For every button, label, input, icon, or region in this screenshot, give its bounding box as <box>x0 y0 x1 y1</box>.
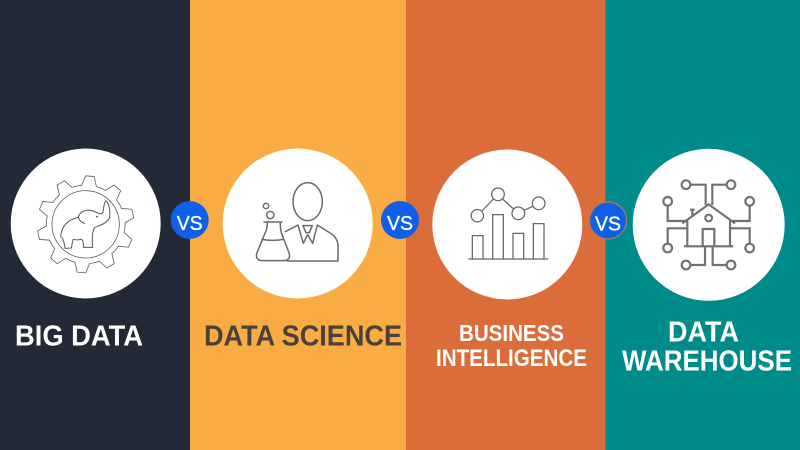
gear outline <box>30 171 141 278</box>
panel: business intelligence <box>406 0 606 450</box>
chimney <box>690 210 695 215</box>
heading line: data: DATA <box>668 316 739 348</box>
elephant eye <box>96 216 98 217</box>
white icon circle <box>223 148 373 298</box>
heading: business intelligence <box>436 320 587 372</box>
panel background: navy <box>0 0 190 450</box>
circuit traces <box>668 185 750 265</box>
white icon circle <box>11 148 161 298</box>
bars <box>472 215 544 259</box>
heading line: business: BUSINESS <box>459 320 564 346</box>
badge: vs 3 <box>590 202 626 239</box>
heading line: intelligence: INTELLIGENCE <box>436 345 587 372</box>
icon: house with circuit nodes <box>663 180 754 269</box>
white icon circle <box>633 149 785 301</box>
panel: data science <box>190 0 406 450</box>
badge: vs 2 <box>381 201 419 239</box>
trend circles <box>471 188 545 222</box>
elephant outline <box>61 201 110 248</box>
white icon circle <box>432 150 582 300</box>
icon: bar and line chart <box>468 188 548 259</box>
house outline <box>682 204 735 246</box>
heading: data warehouse <box>622 316 792 378</box>
panel: data warehouse <box>606 0 800 450</box>
heading: data science: DATA SCIENCE <box>204 320 402 352</box>
bubbles <box>263 203 269 209</box>
flask <box>256 222 290 261</box>
scientist suit <box>285 225 338 261</box>
badge: vs 1 <box>171 201 209 239</box>
baseline <box>468 257 548 261</box>
badge: vs 1: VS <box>177 213 203 235</box>
panel background: burnt orange <box>406 0 606 450</box>
icon: scientist with flask <box>256 183 338 261</box>
badge: vs 2: VS <box>387 213 413 235</box>
panel background: amber <box>190 0 406 450</box>
large bubble <box>267 211 274 219</box>
panel background: teal <box>606 0 800 450</box>
heading: big data: BIG DATA <box>15 320 143 352</box>
panel: big data <box>0 0 190 450</box>
house window <box>705 215 712 221</box>
badge: vs 3: VS <box>595 214 621 236</box>
trend line <box>482 199 533 211</box>
circuit nodes <box>663 180 754 269</box>
icon: elephant in gear <box>30 171 141 278</box>
scientist head <box>293 183 322 221</box>
